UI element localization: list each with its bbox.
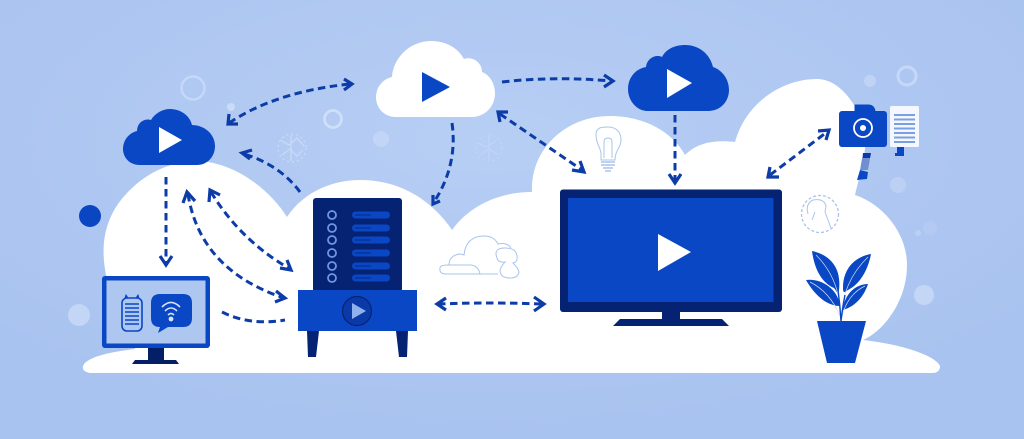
pot [817,321,866,363]
arrow: TV and camera [768,130,829,177]
faint network texture centre [476,135,502,161]
play button [342,296,372,326]
arrow: server and TV [437,297,544,311]
server panel [313,198,402,292]
icon: wifi bubble [151,294,192,333]
decorative bubbles [68,67,937,326]
white cloud landscape [83,79,940,373]
arrow: server to left cloud [242,150,300,192]
line icon: light bulb [596,127,621,171]
arrow: top cloud to right cloud [502,75,613,87]
leaves [806,251,871,310]
brush [857,153,871,180]
line icon: sleeping cloud [440,236,519,278]
server legs [307,331,408,357]
arrow: left cloud and server curve [183,192,285,302]
cloud icon: left blue [123,109,215,165]
arrow: left cloud to top cloud [228,79,352,124]
arrow: left cloud to monitor [160,177,172,265]
arrow: top cloud to server [433,123,453,204]
camera [839,105,887,147]
line icon: circular portrait [802,196,838,232]
arrow: left cloud and server straight [209,190,291,270]
server cabinet [298,198,417,357]
small monitor [102,276,210,364]
plant [806,251,871,363]
dark dot [79,205,101,227]
faint network texture left [278,134,306,162]
icon: device [122,295,142,331]
cloud icon: top white [376,41,495,117]
dashed link: monitor to server [222,312,285,322]
cloud icon: right blue [628,45,729,111]
server base [298,290,417,331]
arrow: top cloud and bulb area [498,112,584,172]
clipboard [890,106,919,156]
arrow: right cloud to TV [669,115,681,183]
TV [560,190,782,326]
